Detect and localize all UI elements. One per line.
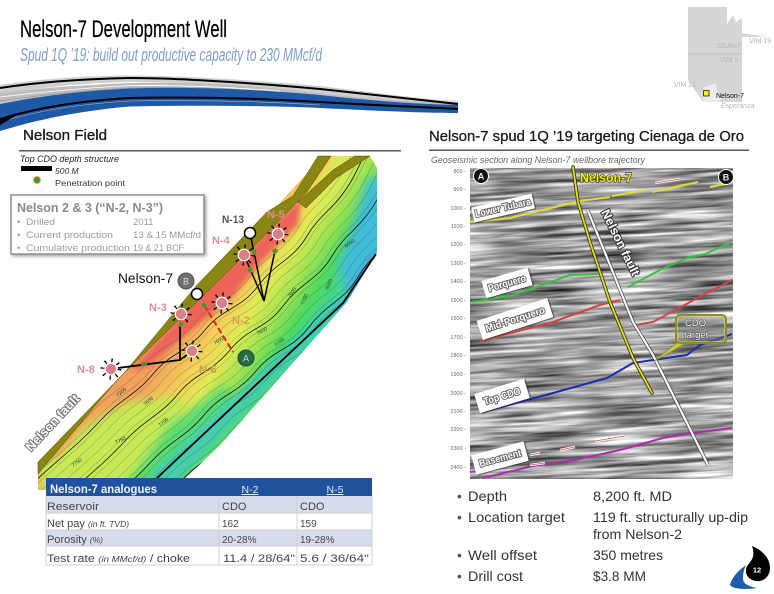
well facts list: 350 metres	[593, 547, 663, 563]
well labels: N-3	[149, 302, 167, 314]
marker A seismic	[474, 168, 488, 184]
well facts list: from Nelson-2	[593, 526, 682, 542]
callout: Nelson 2 & 3: •	[17, 243, 20, 254]
label: Top CDO	[474, 379, 530, 413]
label: Mid-Porquero: Mid-Porquero	[484, 305, 546, 335]
well labels: N-8	[77, 364, 95, 376]
well labels	[77, 209, 285, 376]
label: Basement	[471, 441, 529, 475]
map legend	[20, 154, 126, 188]
depth axis: 1700 -	[450, 335, 466, 341]
Nelson-7 wellbore	[573, 167, 652, 393]
well facts list: •	[457, 509, 462, 525]
well facts list: •	[457, 547, 462, 563]
depth axis: 1800 -	[450, 353, 466, 359]
callout: Nelson 2 & 3: Nelson 2 & 3 (“N-2, N-3”)	[17, 200, 163, 215]
contour labels: 7600	[142, 396, 155, 408]
map legend: Top CDO depth structure	[20, 154, 119, 164]
depth axis: 1100 -	[451, 224, 466, 230]
contour labels: 7700	[300, 293, 310, 306]
heading: Nelson Field: Nelson Field	[23, 128, 107, 144]
marker A seismic: A	[478, 172, 485, 182]
depth axis: 1600 -	[450, 316, 466, 322]
depth axis: 1500 -	[450, 298, 466, 304]
well facts list: Well offset	[468, 547, 537, 563]
title: Nelson-7 Development Well	[20, 16, 227, 43]
table: Nelson-7 analogues: Nelson-7 analogues	[50, 484, 157, 496]
heading rule left	[19, 150, 401, 152]
table: Nelson-7 analogues: Reservoir	[47, 501, 99, 513]
logo page number: 12	[753, 566, 761, 574]
penetration points	[142, 248, 278, 366]
heading rule right	[429, 150, 749, 151]
contour labels: 7600	[287, 286, 298, 299]
table: Nelson-7 analogues: 20-28%	[222, 535, 257, 546]
marker A: A	[243, 354, 249, 364]
horizons	[470, 182, 732, 478]
depth axis: 1900 -	[450, 372, 466, 378]
decorative swoosh banner	[0, 76, 458, 131]
contour labels: 7600	[213, 335, 225, 347]
table: Nelson-7 analogues	[46, 478, 372, 565]
depth axis: 800 -	[453, 169, 466, 175]
marker B: B	[183, 276, 189, 286]
contour labels: 8000	[344, 238, 356, 250]
depth axis: 2100 -	[450, 409, 466, 415]
label: Porquero	[481, 268, 533, 298]
well facts list: Depth	[468, 488, 507, 504]
callout: CDO target: target	[684, 330, 709, 341]
contour labels: 7650	[256, 326, 269, 337]
table: Nelson-7 analogues: 11.4 / 28/64"	[223, 553, 295, 565]
label: Top CDO: Top CDO	[483, 386, 522, 408]
panel: seismic section	[450, 165, 733, 479]
well facts list: Location target	[468, 509, 565, 525]
label: Porquero: Porquero	[487, 273, 528, 295]
well labels: N-6	[199, 364, 217, 376]
well facts list	[457, 488, 748, 584]
contour labels: 7750	[114, 436, 127, 446]
map legend: Penetration point	[55, 178, 126, 188]
well facts list: •	[457, 488, 462, 504]
table: Nelson-7 analogues: Porosity (%)	[47, 534, 103, 546]
contour labels: 8000	[324, 278, 335, 291]
table: Nelson-7 analogues: Test rate (in MMcf/d) / choke	[47, 553, 190, 565]
seismic caption: Geoseismic section along Nelson-7 wellbore trajectory	[431, 155, 645, 165]
table: Nelson-7 analogues: 162	[222, 519, 239, 530]
callout: Nelson 2 & 3: 19 & 21 BCF	[133, 243, 184, 254]
depth axis: 2000 -	[450, 391, 466, 397]
label: Lower Tubara: Lower Tubara	[474, 197, 532, 220]
table: Nelson-7 analogues: 5.6 / 36/64"	[300, 553, 369, 565]
marker A	[238, 350, 254, 366]
section line A-B	[204, 305, 233, 352]
well trajectories	[118, 233, 275, 368]
red seismic streaks	[530, 179, 680, 465]
well facts list: Drill cost	[468, 568, 523, 584]
panel: structure map	[24, 156, 377, 490]
table: Nelson-7 analogues: N-5	[327, 484, 344, 496]
well labels: N-4	[212, 235, 231, 247]
callout: Nelson 2 & 3: Current production	[26, 230, 113, 241]
table: Nelson-7 analogues: 19-28%	[300, 535, 335, 546]
planned well locations	[192, 228, 256, 300]
callout: CDO target	[653, 315, 726, 362]
callout: Nelson 2 & 3: 2011	[133, 217, 153, 228]
olive fault branch	[298, 156, 370, 208]
depth axis: 1400 -	[450, 279, 466, 285]
callout: Nelson 2 & 3: Drilled	[26, 217, 55, 228]
callout: CDO target: CDO	[685, 318, 706, 329]
marker B seismic: B	[723, 172, 730, 182]
table: Nelson-7 analogues: CDO	[300, 501, 325, 513]
Nelson fault label: Nelson fault	[23, 391, 83, 454]
table: Nelson-7 analogues: Net pay (in ft. TVD)	[47, 518, 129, 530]
label: Nelson-7: Nelson-7	[580, 171, 632, 185]
contour labels	[71, 238, 356, 469]
depth axis: 2400 -	[450, 465, 466, 471]
callout: Nelson 2 & 3: •	[17, 230, 20, 241]
depth axis: 1300 -	[450, 261, 466, 267]
label: Nelson fault: Nelson fault	[598, 207, 643, 279]
locator map: VIM 19	[749, 38, 771, 45]
locator map: Nelson-7	[716, 93, 744, 100]
callout: Nelson 2 & 3	[11, 195, 204, 254]
depth axis: 2300 -	[450, 446, 466, 452]
locator map: VIM 21	[674, 82, 696, 89]
contour labels: 7700	[273, 337, 286, 349]
label: Basement: Basement	[478, 448, 523, 470]
marker B seismic	[718, 170, 734, 184]
well facts list: $3.8 MM	[593, 568, 646, 584]
table: Nelson-7 analogues: N-2	[242, 484, 259, 496]
locator map: SSJN-7	[717, 43, 741, 50]
callout: Nelson 2 & 3: 13 & 15 MMcf/d	[133, 230, 201, 241]
table: Nelson-7 analogues: CDO	[222, 501, 247, 513]
map legend: 500 M	[55, 166, 80, 176]
well labels: N-5	[267, 209, 285, 221]
well symbol rays	[102, 226, 286, 378]
producing wells	[105, 228, 284, 375]
well facts list: 119 ft. structurally up-dip	[593, 509, 748, 525]
Nelson-7 label: Nelson-7	[118, 271, 173, 286]
well labels: N-13	[222, 214, 244, 226]
depth axis	[450, 169, 466, 471]
heading: Nelson-7 spud: Nelson-7 spud 1Q ’19 targeting Cienaga de Oro	[429, 128, 744, 145]
label: Mid-Porquero	[477, 298, 553, 340]
lower fault line	[157, 254, 376, 478]
well facts list: •	[457, 568, 462, 584]
locator map: VIM 5	[720, 57, 738, 64]
contour map surface	[38, 156, 377, 490]
marker B	[178, 273, 194, 289]
callout: Nelson 2 & 3: Cumulative production	[26, 243, 130, 254]
depth axis: 1000 -	[450, 206, 466, 212]
locator map	[674, 7, 771, 110]
depth axis: 2200 -	[450, 427, 466, 433]
contour labels: 7750	[71, 457, 83, 469]
depth axis: 1200 -	[450, 242, 466, 248]
table: Nelson-7 analogues: 159	[300, 519, 317, 530]
well facts list: 8,200 ft. MD	[593, 488, 672, 504]
locator map: Esperanza	[721, 103, 755, 110]
seismic background	[470, 168, 733, 479]
depth axis: 900 -	[453, 187, 466, 193]
well labels: N-2	[232, 315, 250, 327]
subtitle: Spud 1Q ’19: build out productive capacity to 230 MMcf/d	[20, 45, 323, 65]
contour labels: 7700	[157, 417, 170, 429]
olive fault band	[38, 156, 331, 474]
contour labels: 7200	[115, 387, 128, 399]
callout: Nelson 2 & 3: •	[17, 217, 20, 228]
Nelson fault line	[588, 211, 708, 465]
logo page number	[730, 546, 770, 589]
